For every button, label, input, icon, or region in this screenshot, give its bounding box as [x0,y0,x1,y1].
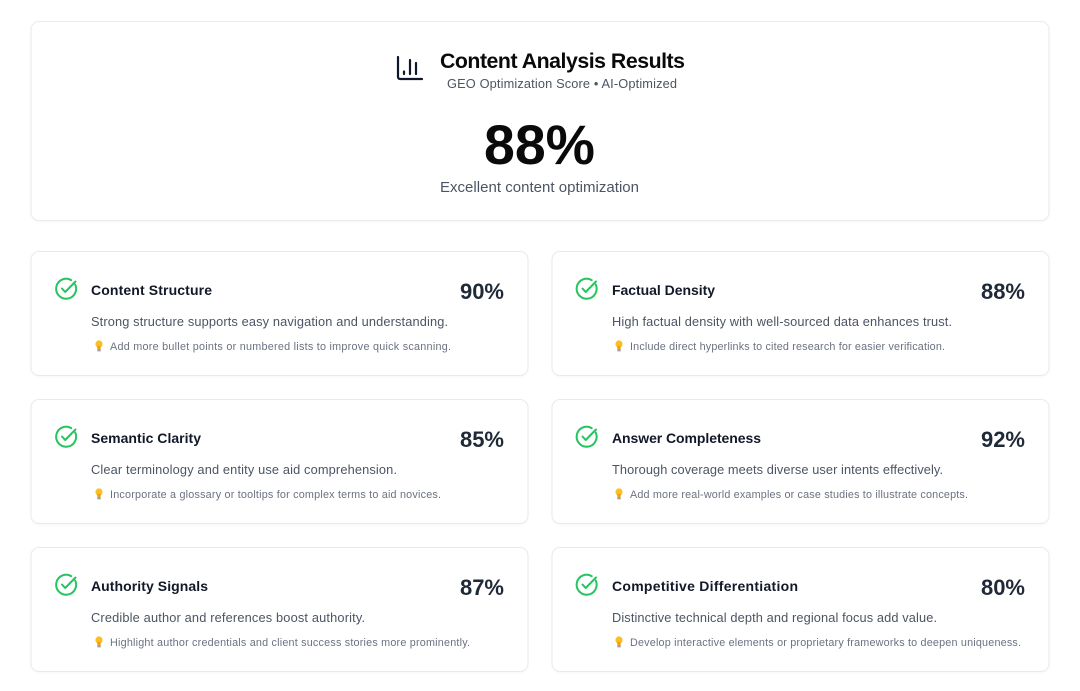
metric score: 92% [981,427,1025,452]
icon: light bulb [615,488,623,499]
score caption: Excellent content optimization [440,179,639,196]
icon: check circle [577,427,597,447]
panel: Authority Signals [31,548,528,672]
improvement tip: Include direct hyperlinks to cited research for easier verification. [630,341,945,353]
panel: Competitive Differentiation [552,548,1049,672]
improvement tip: Add more bullet points or numbered lists to improve quick scanning. [110,341,451,353]
metric score: 90% [460,279,504,304]
icon: check circle [577,575,597,595]
metric score: 80% [981,575,1025,600]
icon: check circle [577,279,597,299]
metric name: Answer Completeness [612,430,761,446]
improvement tip: Incorporate a glossary or tooltips for complex terms to aid novices. [110,489,441,501]
metric name: Semantic Clarity [91,430,201,446]
description: Thorough coverage meets diverse user intents effectively. [612,462,943,477]
description: Strong structure supports easy navigation and understanding. [91,314,448,329]
metric score: 85% [460,427,504,452]
panel: Content Structure [31,252,528,376]
metric name: Competitive Differentiation [612,578,798,594]
metric name: Factual Density [612,282,715,298]
icon: check circle [56,427,76,447]
panel: Factual Density [552,252,1049,376]
description: Distinctive technical depth and regional focus add value. [612,610,937,625]
icon: light bulb [615,636,623,647]
metric score: 87% [460,575,504,600]
description: Credible author and references boost authority. [91,610,365,625]
panel: Answer Completeness [552,400,1049,524]
panel: overall score header [31,22,1049,220]
icon: check circle [56,575,76,595]
improvement tip: Highlight author credentials and client success stories more prominently. [110,637,470,649]
improvement tip: Add more real-world examples or case studies to illustrate concepts. [630,489,968,501]
icon: check circle [56,279,76,299]
metric score: 88% [981,279,1025,304]
metric name: Content Structure [91,282,212,298]
icon: light bulb [95,636,103,647]
icon: light bulb [615,340,623,351]
description: Clear terminology and entity use aid comprehension. [91,462,397,477]
panel: Semantic Clarity [31,400,528,524]
overall score: 88% [484,113,595,176]
subtitle: GEO Optimization Score • AI-Optimized [447,76,677,91]
improvement tip: Develop interactive elements or proprietary frameworks to deepen uniqueness. [630,637,1021,649]
icon: bar chart [398,57,422,79]
icon: light bulb [95,340,103,351]
icon: light bulb [95,488,103,499]
description: High factual density with well-sourced data enhances trust. [612,314,952,329]
title: Content Analysis Results [440,49,685,73]
metric name: Authority Signals [91,578,208,594]
